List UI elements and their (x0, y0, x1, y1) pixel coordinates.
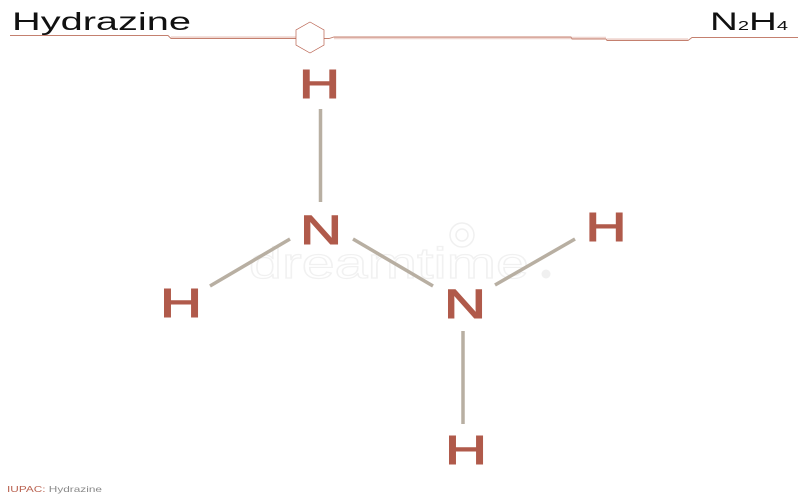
icon: hexagon (296, 22, 324, 53)
atom: top hydrogen: H (299, 61, 340, 107)
atom: nitrogen left: N (300, 207, 342, 253)
caption: IUPAC name: IUPAC: Hydrazine (7, 484, 102, 494)
atom: right hydrogen: H (586, 204, 626, 250)
formula: N 2H 4 (710, 8, 788, 36)
atom: left hydrogen: H (160, 280, 202, 326)
atoms (160, 61, 626, 473)
watermark: dreamtime (249, 239, 529, 288)
title: Hydrazine (12, 8, 191, 36)
watermark (249, 223, 550, 288)
atom: nitrogen right: N (444, 281, 486, 327)
bonds (210, 109, 575, 424)
header line with hexagon (10, 22, 798, 53)
atom: bottom hydrogen: H (445, 427, 487, 473)
